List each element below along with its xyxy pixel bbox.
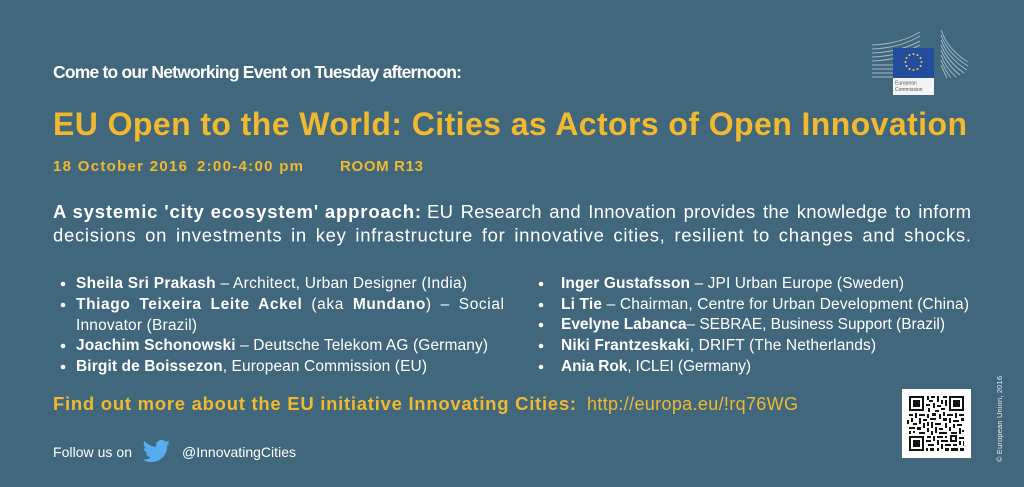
speaker list: right column: Li Tie – Chairman, Centre for Urban Development (China) [561,296,969,313]
speaker list: right column: Evelyne Labanca– SEBRAE, Business Support (Brazil) [561,316,945,333]
speaker list: right column: Niki Frantzeskaki, DRIFT (The Netherlands) [561,337,876,354]
speaker list: right column: Ania Rok, ICLEI (Germany) [561,358,751,375]
title: EU Open to the World: Cities as Actors of Open Innovation [53,106,967,142]
call to action with link: Find out more about the EU initiative Innovating Cities: [53,393,576,414]
event date, time and room: 18 October 2016 [53,158,187,175]
speaker list: left column: Thiago Teixeira Leite Ackel (aka Mundano) – Social [76,296,504,313]
speaker list: right column: Inger Gustafsson – JPI Urban Europe (Sweden) [561,275,904,292]
icon: European Commission logo [872,30,968,95]
event date, time and room: 2:00-4:00 pm [197,158,303,175]
call to action with link: http://europa.eu/!rq76WG [587,394,798,414]
icon: European Commission logo: Commission [895,87,923,93]
social follow line: @InnovatingCities [182,444,296,460]
text block: systemic city ecosystem approach: decisions on investments in key infrastructure for innovative cities, resilient to changes and shocks. [53,224,971,246]
speaker list: left column: Joachim Schonowski – Deutsche Telekom AG (Germany) [76,337,488,354]
text block: systemic city ecosystem approach: EU Research and Innovation provides the knowledge to inform [427,201,971,222]
speaker list: left column: Innovator (Brazil) [76,317,197,334]
text block: systemic city ecosystem approach: A systemic 'city ecosystem' approach: [53,201,421,222]
QR code [902,389,971,458]
heading: networking event invitation: Come to our Networking Event on Tuesday afternoon: [53,62,462,82]
icon: European Commission logo: European [895,80,917,86]
speaker list: right column [539,275,969,375]
event date, time and room [53,158,423,175]
speaker list: left column: Sheila Sri Prakash – Architect, Urban Designer (India) [76,275,467,292]
icon: twitter bird [143,440,170,462]
social follow line: Follow us on [53,444,132,460]
event date, time and room: ROOM R13 [340,158,423,175]
speaker list: left column [61,275,504,375]
speaker list: left column: Birgit de Boissezon, European Commission (EU) [76,358,427,375]
social follow line [53,440,296,462]
copyright notice: © European Union, 2016 [995,376,1004,462]
text block: systemic city ecosystem approach [53,201,971,246]
